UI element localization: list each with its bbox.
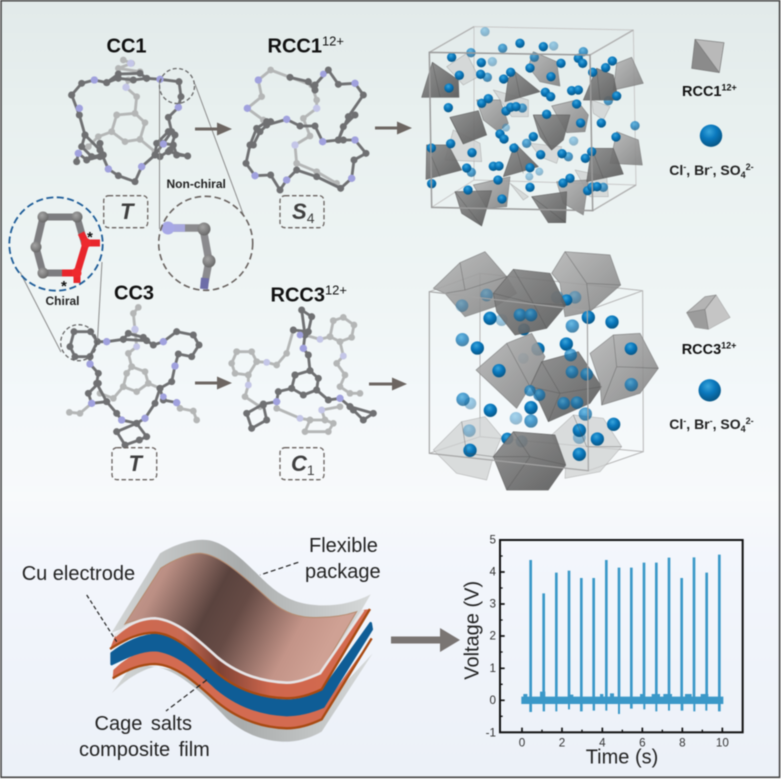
y axis labels: 1: [490, 662, 496, 675]
label: anions (bottom): , Br: [686, 416, 710, 432]
voltage spikes: [531, 555, 719, 700]
x axis labels: [519, 737, 729, 750]
x axis labels: 10: [716, 737, 729, 750]
label: RCC3 12+ legend: RCC3: [682, 342, 721, 358]
heading: RCC3 12+: RCC3: [270, 284, 325, 306]
label: RCC1 12+ legend: 12+: [721, 82, 737, 92]
symmetry label: T (CC3): T: [128, 451, 144, 476]
symmetry label: S4 (RCC1): S: [292, 199, 307, 224]
lower copper electrode: [113, 638, 372, 728]
x axis labels: 8: [679, 737, 686, 750]
y axis labels: 2: [490, 630, 496, 643]
crystal packing: RCC3: [429, 252, 658, 490]
label: anions (bottom): , SO: [713, 416, 741, 432]
zoom lines: non-chiral callout: [160, 80, 244, 229]
icon: anion ball (bottom): [698, 379, 721, 401]
leader line: composite film: [166, 680, 207, 711]
label: anions (top): , Br: [686, 162, 710, 178]
callout: chiral ring: *: [87, 229, 93, 246]
y axis labels: -1: [486, 726, 496, 739]
label: anions (top): , SO: [713, 162, 741, 178]
label: Cage salts composite film: composite film: [79, 739, 210, 761]
arrow: CC3 to RCC3: [195, 376, 232, 390]
y axis labels: 3: [490, 598, 496, 611]
label: anions (bottom): Cl: [669, 416, 683, 432]
label: Cu electrode: Cu electrode: [22, 563, 135, 585]
plot frame and ticks: [500, 540, 743, 732]
flexible device illustration: [110, 540, 373, 742]
molecule: CC3: [69, 307, 199, 445]
arrow: device to chart: [391, 628, 460, 652]
y axis labels: [486, 533, 497, 739]
heading: RCC1 12+: 12+: [322, 34, 344, 48]
label: Flexible package: Flexible: [309, 535, 378, 557]
label: anions (top): 4: [741, 170, 746, 180]
arrow: RCC1 to crystal: [375, 122, 412, 134]
leader line: Cu electrode: [87, 595, 117, 642]
y axis labels: 5: [490, 533, 496, 546]
label: Chiral: Chiral: [46, 294, 80, 308]
upper package layer: [112, 540, 371, 673]
white package edge: [115, 610, 363, 683]
label: anions (top): -: [683, 162, 686, 172]
heading: RCC1 12+: RCC1: [268, 36, 322, 58]
x axis labels: 4: [599, 737, 606, 750]
label: anions (bottom): 4: [741, 424, 746, 434]
zoom lines: chiral callout: [20, 262, 102, 352]
y axis labels: 4: [490, 566, 497, 579]
chart: voltage vs time: [462, 533, 743, 769]
molecule: CC1: [72, 60, 188, 182]
y axis labels: 0: [490, 694, 497, 707]
heading: CC1: CC1: [106, 36, 147, 58]
heading: CC3: CC3: [114, 282, 154, 304]
symmetry label: C1 (RCC3): [280, 448, 324, 480]
crystal packing: RCC1: [422, 27, 643, 226]
label: anions (top): -: [710, 162, 713, 172]
callout: chiral ring: *: [61, 278, 67, 295]
arrow: CC1 to RCC1: [195, 122, 232, 136]
label: anions (top): 2-: [746, 162, 754, 172]
leader line: flexible package: [260, 562, 298, 575]
dashed circle: CC3 ring: [61, 325, 97, 361]
symmetry label: S4 (RCC1): [280, 196, 324, 228]
upper copper electrode: [110, 609, 370, 698]
label: Flexible package: package: [305, 561, 381, 583]
icon: polyhedron RCC3: [687, 295, 730, 329]
symmetry label: C1 (RCC3): C: [291, 451, 307, 476]
callout: non-chiral fragment: [159, 196, 253, 290]
molecule: RCC3: [232, 310, 373, 432]
symmetry label: T (CC1): [104, 196, 148, 228]
callout: chiral ring: [9, 197, 103, 295]
label: Non-chiral: Non-chiral: [166, 177, 226, 191]
molecule: RCC1: [244, 70, 366, 190]
noise baseline: [521, 692, 723, 714]
label: Cage salts composite film: Cage salts: [94, 713, 192, 735]
x axis labels: 0: [519, 737, 526, 750]
separator: blue composite film: [112, 623, 372, 715]
x axis title: Time (s): [586, 747, 658, 769]
copper surface: [125, 553, 357, 683]
lower package layer: [112, 653, 373, 742]
label: anions (top): Cl: [669, 162, 683, 178]
icon: octahedron RCC1: [692, 39, 724, 73]
symmetry label: T (CC1): T: [120, 199, 135, 224]
y axis title: Voltage (V): [462, 581, 484, 680]
dashed circle: CC1 arm: [160, 68, 194, 104]
x axis labels: 2: [559, 737, 565, 750]
label: anions (bottom): -: [683, 416, 686, 426]
label: anions (bottom): 2-: [746, 416, 754, 426]
arrow: RCC3 to crystal: [369, 378, 407, 390]
symmetry label: C1 (RCC3): 1: [307, 462, 315, 478]
label: RCC1 12+ legend: RCC1: [682, 84, 721, 100]
icon: anion ball (top): [700, 124, 722, 147]
symmetry label: T (CC3): [112, 448, 157, 480]
label: anions (bottom): -: [710, 416, 713, 426]
x axis labels: 6: [639, 737, 646, 750]
symmetry label: S4 (RCC1): 4: [307, 210, 315, 226]
heading: RCC3 12+: 12+: [325, 282, 347, 298]
label: RCC3 12+ legend: 12+: [721, 340, 736, 350]
